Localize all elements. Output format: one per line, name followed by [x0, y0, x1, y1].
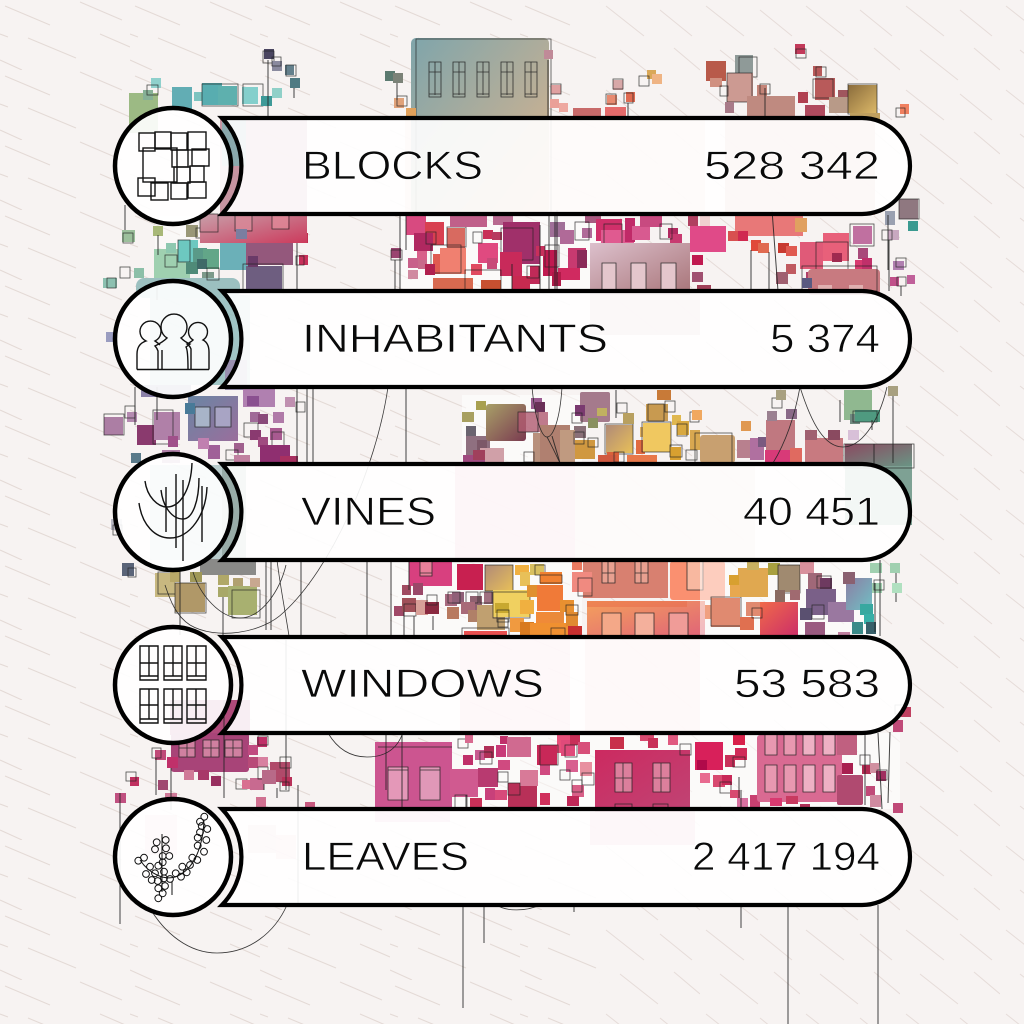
- stat row: LEAVES: [115, 799, 910, 915]
- value: blocks: 528 342: [704, 144, 880, 188]
- cluster: purple blocks, left: [104, 332, 307, 463]
- icon: windows: [140, 646, 206, 723]
- icon: vines: [139, 463, 207, 561]
- value: vines: 40 451: [743, 490, 880, 534]
- stat row: INHABITANTS: [115, 281, 910, 397]
- banner: leaves: [222, 809, 910, 905]
- stat row: BLOCKS: [115, 108, 910, 224]
- building: teal to tan with five windows: [411, 38, 551, 214]
- cluster: rose and green blocks, right: [737, 386, 914, 468]
- icon: inhabitants: [137, 314, 209, 370]
- value: inhabitants: 5 374: [770, 317, 880, 361]
- cluster: orange blocks left of building: [385, 71, 416, 118]
- cluster: top right brown blocks: [706, 44, 909, 120]
- banner: inhabitants: [222, 291, 910, 387]
- cluster: magenta to gold blocks, centre: [391, 559, 582, 637]
- circle badge: windows: [115, 627, 231, 743]
- circle badge: leaves: [115, 799, 231, 915]
- buildings: coral blocks with windows: [572, 560, 725, 636]
- cluster: tan, plum and teal blocks, right: [700, 559, 902, 636]
- cluster: green and teal blocks, left: [103, 205, 308, 300]
- label: leaves: LEAVES: [302, 835, 469, 879]
- cluster: olive blocks, bottom left: [111, 519, 271, 640]
- cluster: pink and red blocks, centre: [391, 210, 682, 291]
- building: rose block under first banner: [200, 214, 307, 243]
- cluster: top left teal blocks: [129, 49, 300, 133]
- banner: vines: [222, 464, 910, 560]
- cluster: salmon blocks, centre right: [688, 199, 919, 296]
- stat row: VINES: [115, 454, 910, 570]
- cluster: olive and plum blocks, centre: [462, 390, 751, 463]
- cluster: top middle red blocks: [544, 50, 662, 120]
- label: inhabitants: INHABITANTS: [302, 317, 608, 361]
- label: blocks: BLOCKS: [302, 144, 483, 188]
- icon: blocks: [138, 132, 209, 200]
- circle badge: inhabitants: [115, 281, 231, 397]
- value: leaves: 2 417 194: [692, 835, 880, 879]
- building: pale rose with three windows: [590, 243, 690, 295]
- cluster: rose buildings and blocks, lower right: [560, 705, 911, 813]
- circle badge: blocks: [115, 108, 231, 224]
- icon: leaves: [135, 813, 211, 902]
- value: windows: 53 583: [734, 662, 880, 706]
- cluster: magenta building and blocks, lower centre: [375, 733, 590, 810]
- label: vines: VINES: [301, 490, 436, 534]
- label: windows: WINDOWS: [301, 662, 544, 706]
- circle badge: vines: [115, 454, 231, 570]
- city: faint blocks behind the banners: [145, 116, 912, 859]
- cluster: magenta building and blocks, lower left: [115, 640, 315, 924]
- vines: hanging arcs and stems: [148, 387, 887, 1024]
- stat row: WINDOWS: [115, 627, 910, 743]
- banner: windows: [222, 637, 910, 733]
- banner: blocks: [222, 118, 910, 214]
